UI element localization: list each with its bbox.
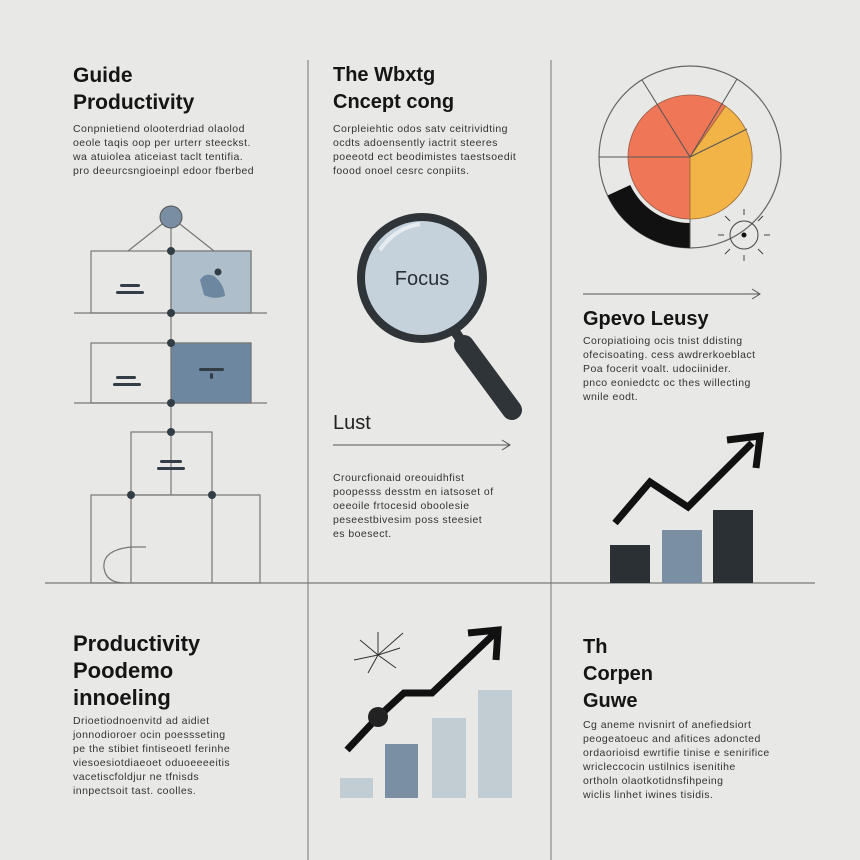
- heading: lust: Lust: [333, 412, 371, 434]
- text block: productivity body: jonnodioroer ocin poessseting: [73, 729, 226, 741]
- text block: lust body: poopesss desstm en iatsoset of: [333, 486, 494, 498]
- title: concept: The Wbxtg: [333, 64, 435, 86]
- title: concept: Cncept cong: [333, 91, 454, 113]
- text block: corpen body: wiclis linhet iwines tisidis.: [583, 789, 713, 801]
- title: productivity bottom: Productivity: [73, 631, 200, 656]
- text block: gpevo body: wnile eodt.: [583, 391, 638, 403]
- title: guide productivity: [73, 64, 194, 114]
- arrow: lust: [333, 440, 511, 450]
- text block: lust body: Crourcfionaid oreouidhfist: [333, 472, 464, 484]
- text block: guide body: wa atuiolea aticeiast taclt tentifia.: [73, 151, 243, 163]
- chart: pie: [598, 65, 782, 261]
- text block: concept body: ocdts adoensently iactrit steeres: [333, 137, 498, 149]
- text block: productivity body: [72, 715, 230, 797]
- title: corpen guwe: Guwe: [583, 690, 637, 712]
- text block: guide body: Conpnietiend olooterdriad olaolod: [73, 123, 245, 135]
- text block: gpevo body: pnco eoniedctc oc thes willecting: [583, 377, 751, 389]
- text block: lust body: [333, 472, 494, 540]
- text block: productivity body: viesoesiotdiaeoet oduoeeeeitis: [73, 757, 230, 769]
- text block: gpevo body: Poa focerit voalt. udociinider.: [583, 363, 731, 375]
- text block: concept body: foood onoel cesrc conpiits.: [333, 165, 469, 177]
- icon: magnifier: Focus: [395, 268, 449, 290]
- icon: magnifier: [357, 213, 522, 420]
- title: corpen guwe: [583, 636, 653, 712]
- text block: corpen body: [583, 719, 770, 801]
- text block: gpevo body: ofecisoating. cess awdrerkoeblact: [583, 349, 755, 361]
- text block: concept body: poeeotd ect beodimistes taestsoedit: [333, 151, 516, 163]
- chart: rising bars: [610, 432, 764, 583]
- chart: bottom bars with arrow: [340, 626, 512, 798]
- title: corpen guwe: Corpen: [583, 663, 653, 685]
- title: productivity bottom: innoeling: [73, 685, 171, 710]
- text block: lust body: peseestbivesim poss steesiet: [333, 514, 482, 526]
- text block: productivity body: innpectsoit tast. coolles.: [73, 785, 196, 797]
- text block: guide body: [73, 123, 254, 177]
- text block: lust body: es boesect.: [333, 528, 392, 540]
- title: guide productivity: Productivity: [73, 91, 194, 114]
- text block: productivity body: Drioetiodnoenvitd ad aidiet: [73, 715, 209, 727]
- text block: guide body: pro deeurcsngioeinpl edoor fberbed: [73, 165, 254, 177]
- title: corpen guwe: Th: [583, 636, 607, 658]
- text block: concept body: Corpleiehtic odos satv ceitrividting: [333, 123, 508, 135]
- title: productivity bottom: [73, 631, 200, 710]
- text block: lust body: oeeoile frtocesid oboolesie: [333, 500, 469, 512]
- text block: corpen body: wricleccocin ustilnics isenitihe: [583, 761, 736, 773]
- arrow: right: [583, 288, 761, 300]
- text block: productivity body: vacetiscfoldjur ne tfnisds: [73, 771, 199, 783]
- text block: corpen body: Cg aneme nvisnirt of anefiedsiort: [583, 719, 751, 731]
- title: productivity bottom: Poodemo: [73, 658, 173, 683]
- text block: corpen body: ortholn olaotkotidnsfihpeing: [583, 775, 723, 787]
- heading: gpevo leusy: Gpevo Leusy: [583, 308, 709, 330]
- text block: gpevo body: [583, 335, 755, 403]
- text block: concept body: [333, 123, 516, 177]
- text block: gpevo body: Coropiatioing ocis tnist ddisting: [583, 335, 743, 347]
- text block: corpen body: ordaorioisd ewrtifie tinise e senirifice: [583, 747, 770, 759]
- text block: guide body: oeole taqis oop per urterr steeckst.: [73, 137, 251, 149]
- title: guide productivity: Guide: [73, 64, 133, 87]
- diagram: flow boxes: [74, 206, 267, 584]
- text block: productivity body: pe the stibiet fintiseoetl ferinhe: [73, 743, 230, 755]
- title: concept: [333, 64, 454, 113]
- text block: corpen body: peogeatoeuc and afitices adoncted: [583, 733, 761, 745]
